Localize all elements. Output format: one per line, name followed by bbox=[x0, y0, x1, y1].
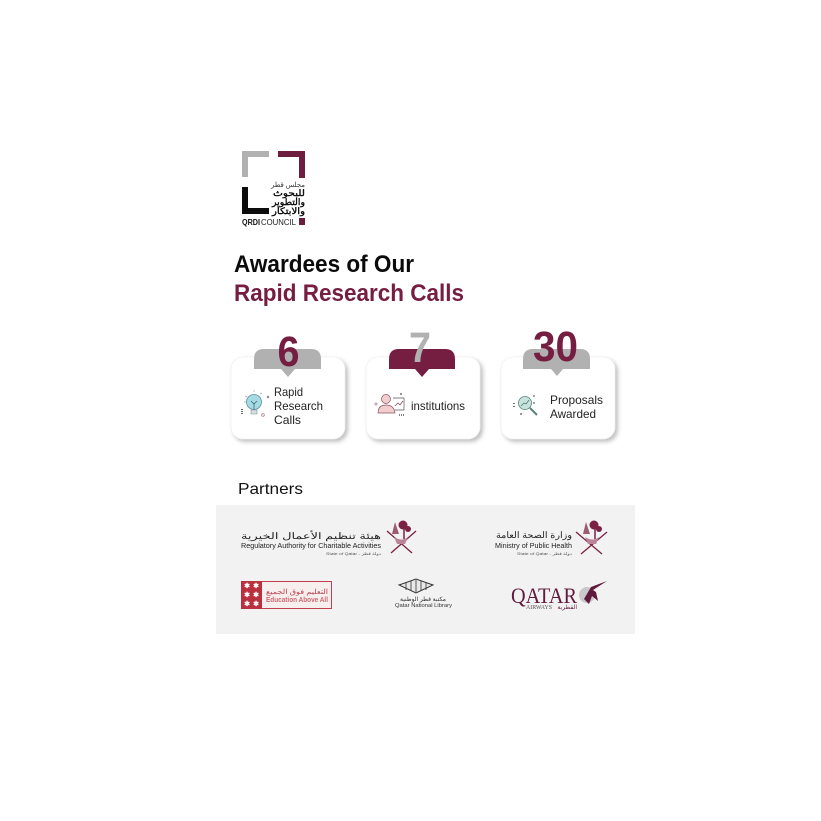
logo: regulatory authority: State of Qatar - دولة قطر bbox=[326, 551, 381, 556]
icon: oryx bbox=[579, 581, 607, 604]
logo: qatar national library bbox=[395, 579, 452, 609]
tab: maroon pointer bbox=[389, 349, 455, 377]
logo: education above all: ✱ bbox=[253, 582, 259, 590]
logo: ministry of public health bbox=[495, 520, 607, 556]
logo: qatar airways bbox=[511, 581, 607, 611]
label: Awarded bbox=[550, 407, 596, 421]
logo: regulatory authority: Regulatory Authority for Charitable Activities bbox=[241, 543, 382, 550]
panel: rapid research calls stat bbox=[231, 328, 345, 439]
panel: institutions stat bbox=[366, 324, 480, 439]
logo: education above all: ✱ bbox=[244, 582, 250, 590]
title: Rapid Research Calls bbox=[234, 280, 464, 307]
logo: QRDI Council: والابتكار bbox=[271, 206, 305, 217]
logo: qatar national library: Qatar National Library bbox=[395, 603, 452, 609]
heading: partners: Partners bbox=[238, 481, 303, 498]
label: Calls bbox=[274, 413, 301, 427]
label bbox=[274, 385, 323, 427]
icon: light bulb bbox=[242, 390, 269, 416]
logo: ministry of public health: وزارة الصحة العامة bbox=[496, 530, 572, 541]
logo: qatar national library: مكتبة قطر الوطنية bbox=[400, 596, 446, 603]
number: 7: 7 bbox=[409, 324, 431, 372]
logo: education above all: ✱ bbox=[253, 591, 259, 599]
label: Research bbox=[274, 399, 323, 413]
logo: qatar airways: AIRWAYS bbox=[526, 605, 552, 611]
title bbox=[234, 251, 464, 307]
logo: education above all: ✱ bbox=[244, 600, 250, 608]
label bbox=[550, 393, 603, 421]
title: Awardees of Our bbox=[234, 251, 414, 278]
logo: education above all: ✱ bbox=[253, 600, 259, 608]
logo: QRDI Council: للبحوث bbox=[273, 188, 305, 199]
label: institutions bbox=[411, 399, 465, 413]
logo: regulatory authority: هيئة تنظيم الأعمال الخيرية bbox=[241, 530, 381, 542]
label: Proposals bbox=[550, 393, 603, 407]
logo: QRDI Council: QRDI bbox=[242, 218, 260, 227]
icon: presenter bbox=[375, 393, 404, 415]
label: Rapid bbox=[274, 385, 303, 399]
logo: QRDI Council: والتطوير bbox=[271, 197, 305, 208]
logo: education above all: التعليم فوق الجميع bbox=[266, 588, 328, 596]
logo: qatar airways: QATAR bbox=[511, 583, 577, 608]
logo: education above all: Education Above All bbox=[266, 595, 328, 604]
icon: magnifier chart bbox=[514, 395, 537, 415]
logo: regulatory authority bbox=[241, 520, 416, 556]
tab: grey pointer bbox=[254, 349, 321, 377]
logo: ministry of public health: Ministry of Public Health bbox=[495, 543, 572, 550]
panel: partners background bbox=[216, 505, 635, 634]
icon: emblem bbox=[576, 520, 607, 554]
logo: education above all bbox=[241, 581, 332, 609]
number: 30: 30 bbox=[533, 323, 578, 371]
number: 6: 6 bbox=[278, 328, 300, 376]
logo: QRDI Council bbox=[242, 151, 305, 227]
logo: QRDI Council: COUNCIL bbox=[261, 218, 297, 227]
tab: grey pointer bbox=[523, 349, 590, 376]
icon: emblem bbox=[387, 520, 416, 553]
logo: education above all: ✱ bbox=[244, 591, 250, 599]
panel: proposals awarded stat bbox=[501, 323, 615, 439]
logo: qatar airways: القطرية bbox=[557, 604, 577, 611]
logo: ministry of public health: State of Qatar - دولة قطر bbox=[517, 551, 572, 556]
logo: QRDI Council: مجلس قطر bbox=[270, 181, 305, 189]
